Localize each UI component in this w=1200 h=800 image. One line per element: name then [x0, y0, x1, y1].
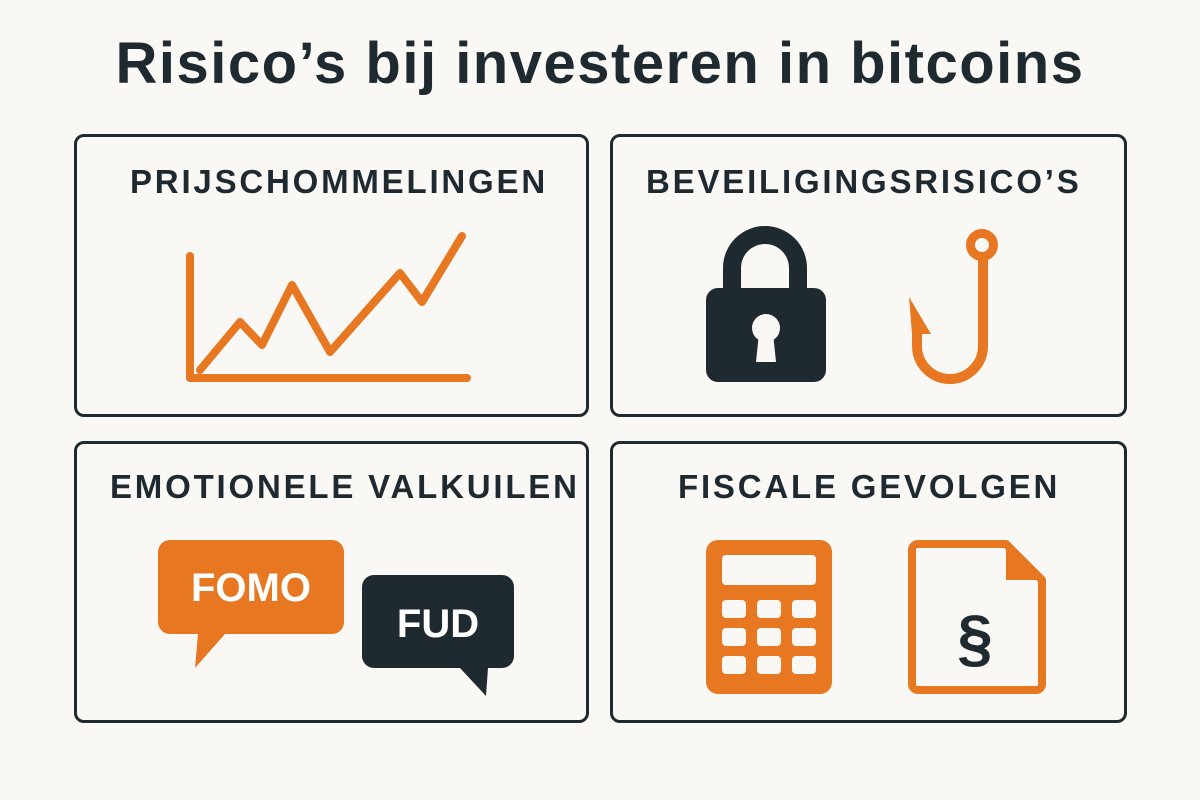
- icon: FOMO bubble: FOMO: [191, 566, 311, 610]
- icon: hook: [909, 234, 994, 379]
- panel: fiscale gevolgen: [610, 441, 1127, 723]
- heading: emotionele valkuilen: EMOTIONELE VALKUILEN: [110, 468, 580, 505]
- icon: lock: [706, 235, 826, 382]
- icon: legal document: [912, 544, 1042, 690]
- chart: price line: [190, 236, 467, 378]
- panel: beveiligingsrisico's: [610, 134, 1127, 417]
- icon: FUD bubble: FUD: [397, 602, 479, 646]
- heading: fiscale gevolgen: FISCALE GEVOLGEN: [678, 468, 1060, 505]
- heading: prijsschommelingen: PRIJSCHOMMELINGEN: [130, 163, 548, 200]
- icon: calculator: [706, 540, 832, 694]
- panel: emotionele valkuilen: [74, 441, 589, 723]
- title: Risico’s bij investeren in bitcoins: [116, 31, 1084, 96]
- icon: FUD bubble: [362, 575, 514, 696]
- heading: beveiligingsrisico's: BEVEILIGINGSRISICO’S: [646, 163, 1082, 200]
- icon: FOMO bubble: [158, 540, 344, 668]
- icon: legal document: §: [957, 602, 993, 674]
- panel: prijsschommelingen: [74, 134, 589, 417]
